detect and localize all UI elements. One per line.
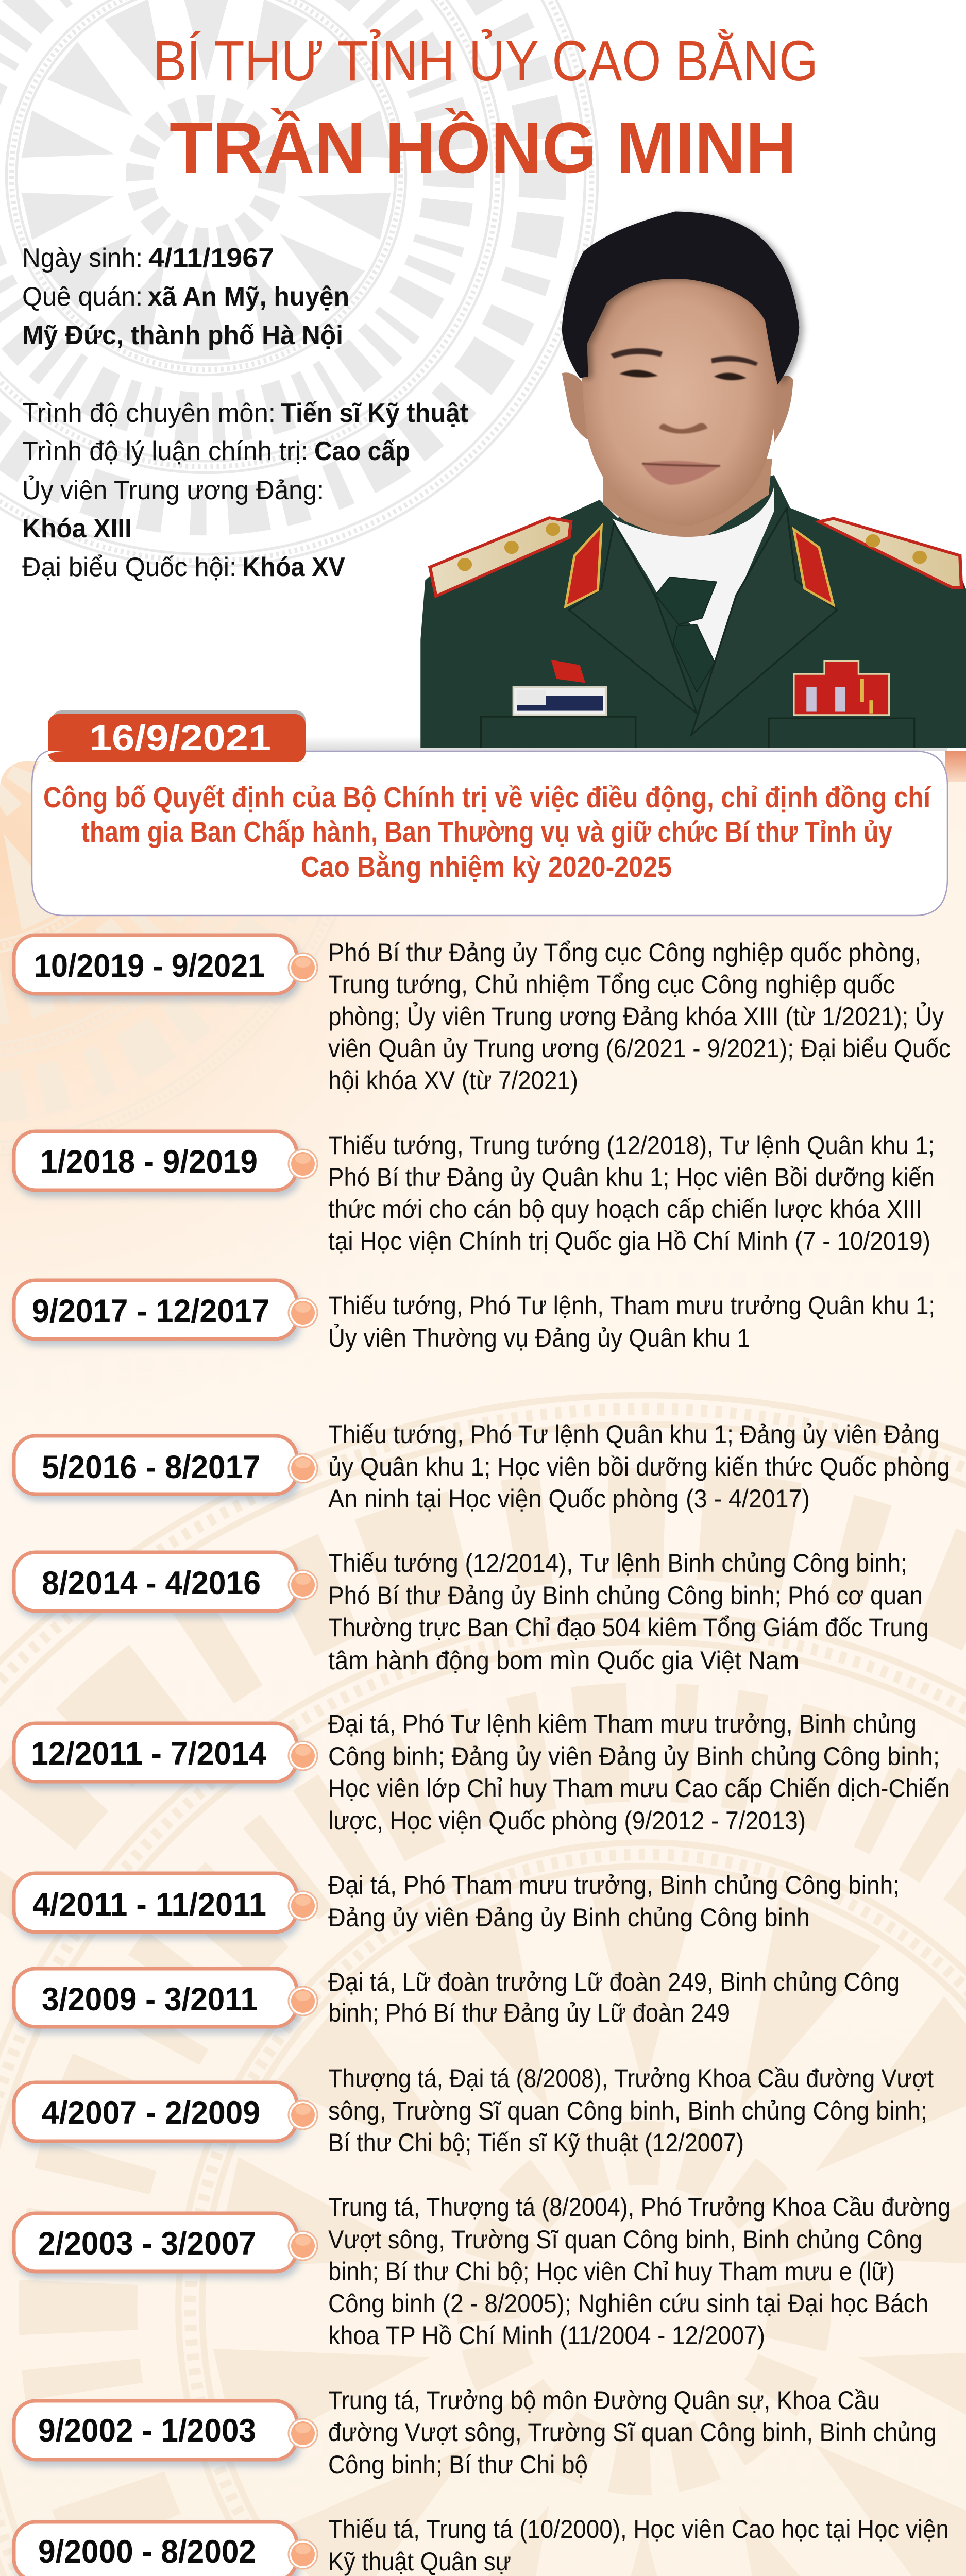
date pill — [14, 2401, 297, 2460]
description — [328, 2515, 949, 2576]
node — [289, 1570, 317, 1599]
description — [328, 1968, 900, 2027]
description: Công binh; Bí thư Chi bộ — [328, 2450, 588, 2479]
date badge — [48, 710, 306, 762]
date pill — [14, 2213, 297, 2272]
lapels — [569, 508, 837, 735]
collar tab left — [566, 526, 601, 606]
description: Đảng ủy viên Đảng ủy Binh chủng Công binh — [328, 1903, 810, 1932]
description: Đại tá, Phó Tham mưu trưởng, Binh chủng Công binh; — [328, 1871, 900, 1900]
date pill — [14, 1436, 297, 1494]
node — [289, 1298, 317, 1327]
timeline entry 12/2011 - 7/2014 — [14, 1709, 950, 1835]
announcement box — [32, 751, 947, 916]
timeline entry 3/2009 - 3/2011 — [14, 1968, 900, 2027]
date pill — [14, 1552, 297, 1611]
description: Trung tá, Trưởng bộ môn Đường Quân sự, Khoa Cầu — [328, 2386, 880, 2415]
date pill — [14, 1131, 297, 1190]
personal info text block: Mỹ Đức, thành phố Hà Nội — [22, 320, 343, 350]
description — [328, 2064, 934, 2157]
personal info text block: Khóa XIII — [22, 514, 132, 544]
date pill: 2/2003 - 3/2007 — [38, 2226, 256, 2262]
hair — [562, 211, 799, 385]
description — [328, 1709, 950, 1835]
description: hội khóa XV (từ 7/2021) — [328, 1066, 578, 1095]
description: binh; Phó Bí thư Đảng ủy Lữ đoàn 249 — [328, 1998, 730, 2027]
date badge text: 16/9/2021 — [89, 718, 271, 758]
node — [289, 1741, 317, 1770]
date pill: 3/2009 - 3/2011 — [42, 1981, 258, 2018]
neck — [603, 459, 772, 547]
eyebrows, eyes, nose, mouth — [611, 348, 758, 485]
description: Phó Bí thư Đảng ủy Binh chủng Công binh; Phó cơ quan — [328, 1581, 923, 1610]
background: bronze drum pattern top — [0, 0, 598, 567]
personal info text block: Tiến sĩ Kỹ thuật — [281, 398, 468, 428]
date pill: 10/2019 - 9/2021 — [34, 948, 265, 984]
description: Đại tá, Lữ đoàn trưởng Lữ đoàn 249, Binh chủng Công — [328, 1968, 900, 1996]
epaulet left — [430, 518, 571, 596]
tie — [655, 577, 717, 692]
date pill — [14, 935, 297, 994]
description — [328, 938, 951, 1095]
description: Vượt sông, Trường Sĩ quan Công binh, Binh chủng Công — [328, 2225, 922, 2254]
description: An ninh tại Học viện Quốc phòng (3 - 4/2017) — [328, 1484, 810, 1513]
announcement box: Cao Bằng nhiệm kỳ 2020-2025 — [301, 850, 672, 884]
date pill: 4/2011 - 11/2011 — [32, 1887, 266, 1923]
node — [289, 2540, 317, 2569]
personal info text block — [22, 243, 468, 582]
description — [328, 1291, 935, 1352]
node — [289, 1149, 317, 1178]
date pill: 1/2018 - 9/2019 — [40, 1144, 258, 1180]
timeline entry 5/2016 - 8/2017 — [14, 1420, 950, 1513]
personal info text block: Cao cấp — [314, 436, 410, 466]
description: Ủy viên Thường vụ Đảng ủy Quân khu 1 — [328, 1323, 750, 1352]
personal info text block: Trình độ chuyên môn: — [22, 398, 276, 428]
timeline entry 4/2007 - 2/2009 — [14, 2064, 934, 2157]
date pill — [14, 1723, 297, 1782]
description: tại Học viện Chính trị Quốc gia Hồ Chí Minh (7 - 10/2019) — [328, 1227, 930, 1256]
date pill — [14, 2522, 297, 2576]
timeline entry 2/2003 - 3/2007 — [14, 2193, 951, 2350]
description: thức mới cho cán bộ quy hoạch cấp chiến lược khóa XIII — [328, 1195, 922, 1224]
date pill: 9/2000 - 8/2002 — [38, 2534, 256, 2570]
shirt — [612, 486, 774, 663]
description: Công binh (2 - 8/2005); Nghiên cứu sinh tại Đại học Bách — [328, 2289, 928, 2318]
epaulet right — [819, 518, 961, 587]
description: Trung tướng, Chủ nhiệm Tổng cục Công nghiệp quốc — [328, 970, 895, 999]
date pill — [14, 2082, 297, 2141]
orange edge strip — [945, 751, 966, 782]
description: Kỹ thuật Quân sự — [328, 2547, 511, 2576]
collar tab right — [794, 529, 834, 605]
timeline entry 9/2002 - 1/2003 — [14, 2386, 937, 2479]
node — [289, 1891, 317, 1920]
description: Công binh; Đảng ủy viên Đảng ủy Binh chủng Công binh; — [328, 1742, 940, 1771]
date pill: 9/2017 - 12/2017 — [32, 1293, 269, 1329]
timeline entry 9/2000 - 8/2002 — [14, 2515, 949, 2576]
personal info text block: Trình độ lý luận chính trị: — [22, 436, 308, 466]
date pill: 4/2007 - 2/2009 — [42, 2095, 260, 2131]
date pill: 12/2011 - 7/2014 — [31, 1736, 266, 1772]
description — [328, 1871, 900, 1932]
description — [328, 2193, 951, 2350]
description: Phó Bí thư Đảng ủy Tổng cục Công nghiệp quốc phòng, — [328, 938, 921, 967]
timeline entry 9/2017 - 12/2017 — [14, 1280, 935, 1352]
pockets — [481, 717, 914, 748]
node — [289, 2231, 317, 2260]
description — [328, 1131, 935, 1256]
personal info text block: Quê quán: — [22, 282, 143, 312]
description: Thiếu tướng (12/2014), Tư lệnh Binh chủng Công binh; — [328, 1549, 907, 1578]
personal info text block: Ngày sinh: — [22, 243, 143, 273]
title — [153, 29, 818, 188]
description — [328, 2386, 937, 2479]
date pill: 5/2016 - 8/2017 — [42, 1449, 260, 1485]
title line 2: name: TRẦN HỒNG MINH — [170, 107, 796, 188]
name tag — [513, 687, 606, 715]
personal info text block: Đại biểu Quốc hội: — [22, 552, 236, 582]
grey shadow strip under photo — [306, 736, 947, 751]
timeline entry 1/2018 - 9/2019 — [14, 1131, 935, 1256]
description: sông, Trường Sĩ quan Công binh, Binh chủng Công binh; — [328, 2096, 927, 2125]
ribbons — [794, 661, 889, 715]
description — [328, 1549, 929, 1675]
node — [289, 1454, 317, 1483]
date pill: 9/2002 - 1/2003 — [38, 2413, 256, 2449]
date pill — [14, 1873, 297, 1932]
node — [289, 1987, 317, 2015]
title line 1: BÍ THƯ TỈNH ỦY CAO BẰNG — [153, 29, 818, 93]
timeline entry 4/2011 - 11/2011 — [14, 1871, 900, 1932]
pin: flag — [551, 660, 585, 683]
description: lược, Học viện Quốc phòng (9/2012 - 7/2013) — [328, 1806, 806, 1835]
node — [289, 953, 317, 982]
personal info text block: Ủy viên Trung ương Đảng: — [22, 475, 324, 505]
description: Đại tá, Phó Tư lệnh kiêm Tham mưu trưởng, Binh chủng — [328, 1709, 917, 1738]
description: binh; Bí thư Chi bộ; Học viên Chỉ huy Tham mưu e (lữ) — [328, 2257, 895, 2286]
date pill: 8/2014 - 4/2016 — [42, 1565, 261, 1601]
personal info text block: 4/11/1967 — [148, 243, 274, 273]
description — [328, 1420, 950, 1513]
epaulet stars — [457, 523, 927, 571]
jacket — [420, 475, 966, 748]
node — [289, 2419, 317, 2448]
node — [289, 2100, 317, 2129]
description: tâm hành động bom mìn Quốc gia Việt Nam — [328, 1646, 799, 1675]
timeline entry 8/2014 - 4/2016 — [14, 1549, 929, 1675]
portrait illustration — [420, 211, 966, 748]
date pill — [14, 1969, 297, 2027]
timeline entry 10/2019 - 9/2021 — [14, 935, 951, 1095]
face and ears — [562, 272, 793, 526]
personal info text block: xã An Mỹ, huyện — [148, 282, 349, 312]
background: peach timeline panel — [0, 761, 966, 2576]
description: khoa TP Hồ Chí Minh (11/2004 - 12/2007) — [328, 2321, 765, 2350]
personal info text block: Khóa XV — [242, 552, 345, 582]
description: Bí thư Chi bộ; Tiến sĩ Kỹ thuật (12/2007) — [328, 2128, 744, 2157]
date pill — [14, 1280, 297, 1339]
